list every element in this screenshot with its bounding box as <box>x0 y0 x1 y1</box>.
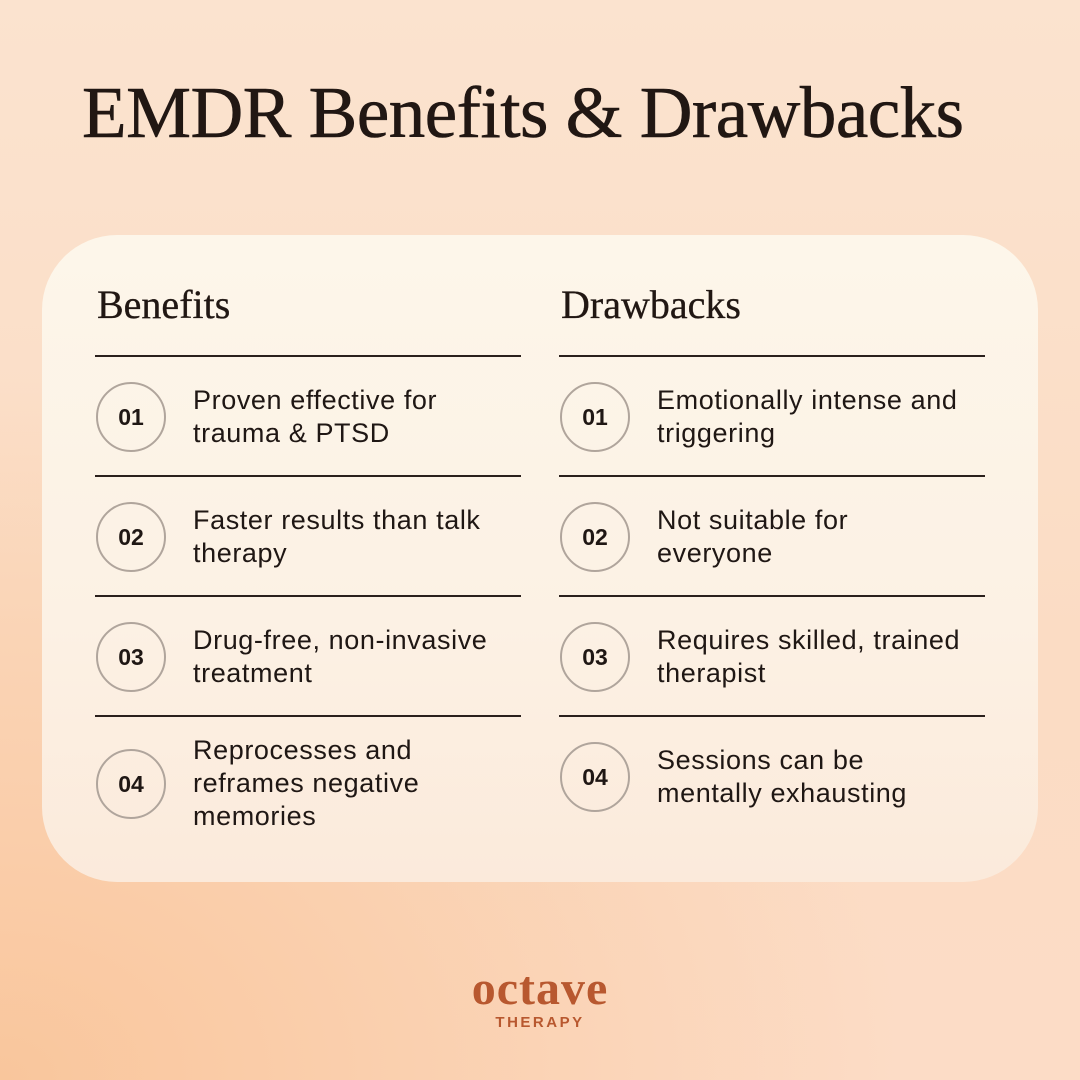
item: benefit 04: 04 <box>118 770 144 796</box>
item: drawback 01: 01 <box>582 404 608 430</box>
item: benefit 03 <box>96 622 487 692</box>
item: benefit 04: reframes negative <box>193 768 419 798</box>
item: benefit 04 <box>96 735 419 831</box>
panel: comparison card <box>42 235 1038 882</box>
heading: drawbacks: Drawbacks <box>561 282 741 327</box>
item: benefit 02: 02 <box>118 524 144 550</box>
item: benefit 03: 03 <box>118 644 144 670</box>
item: drawback 01: triggering <box>657 418 776 448</box>
item: drawback 04: Sessions can be <box>657 745 864 775</box>
item: drawback 02 <box>560 502 848 572</box>
item: drawback 01 <box>560 382 957 452</box>
item: drawback 03: Requires skilled, trained <box>657 625 960 655</box>
item: benefit 02: therapy <box>193 538 287 568</box>
item: benefit 04: memories <box>193 801 316 831</box>
item: drawback 03: therapist <box>657 658 766 688</box>
item: benefit 01: 01 <box>118 404 144 430</box>
column: benefits <box>95 282 521 831</box>
item: benefit 02 <box>96 502 481 572</box>
item: benefit 03: treatment <box>193 658 312 688</box>
item: drawback 04: mentally exhausting <box>657 778 907 808</box>
item: drawback 02: everyone <box>657 538 773 568</box>
item: benefit 04: Reprocesses and <box>193 735 412 765</box>
item: benefit 01 <box>96 382 437 452</box>
item: drawback 02: Not suitable for <box>657 505 848 535</box>
logo: octave therapy: THERAPY <box>495 1014 585 1031</box>
item: drawback 01: Emotionally intense and <box>657 385 957 415</box>
logo: octave therapy: octave <box>472 962 608 1015</box>
item: benefit 01: trauma & PTSD <box>193 418 390 448</box>
column: drawbacks <box>559 282 985 812</box>
title: EMDR Benefits & Drawbacks <box>82 72 964 153</box>
item: benefit 01: Proven effective for <box>193 385 437 415</box>
item: drawback 04: 04 <box>582 764 608 790</box>
item: drawback 04 <box>560 742 907 812</box>
item: benefit 03: Drug-free, non-invasive <box>193 625 487 655</box>
item: drawback 03: 03 <box>582 644 608 670</box>
item: drawback 03 <box>560 622 960 692</box>
item: benefit 02: Faster results than talk <box>193 505 481 535</box>
heading: benefits: Benefits <box>97 282 230 327</box>
item: drawback 02: 02 <box>582 524 608 550</box>
